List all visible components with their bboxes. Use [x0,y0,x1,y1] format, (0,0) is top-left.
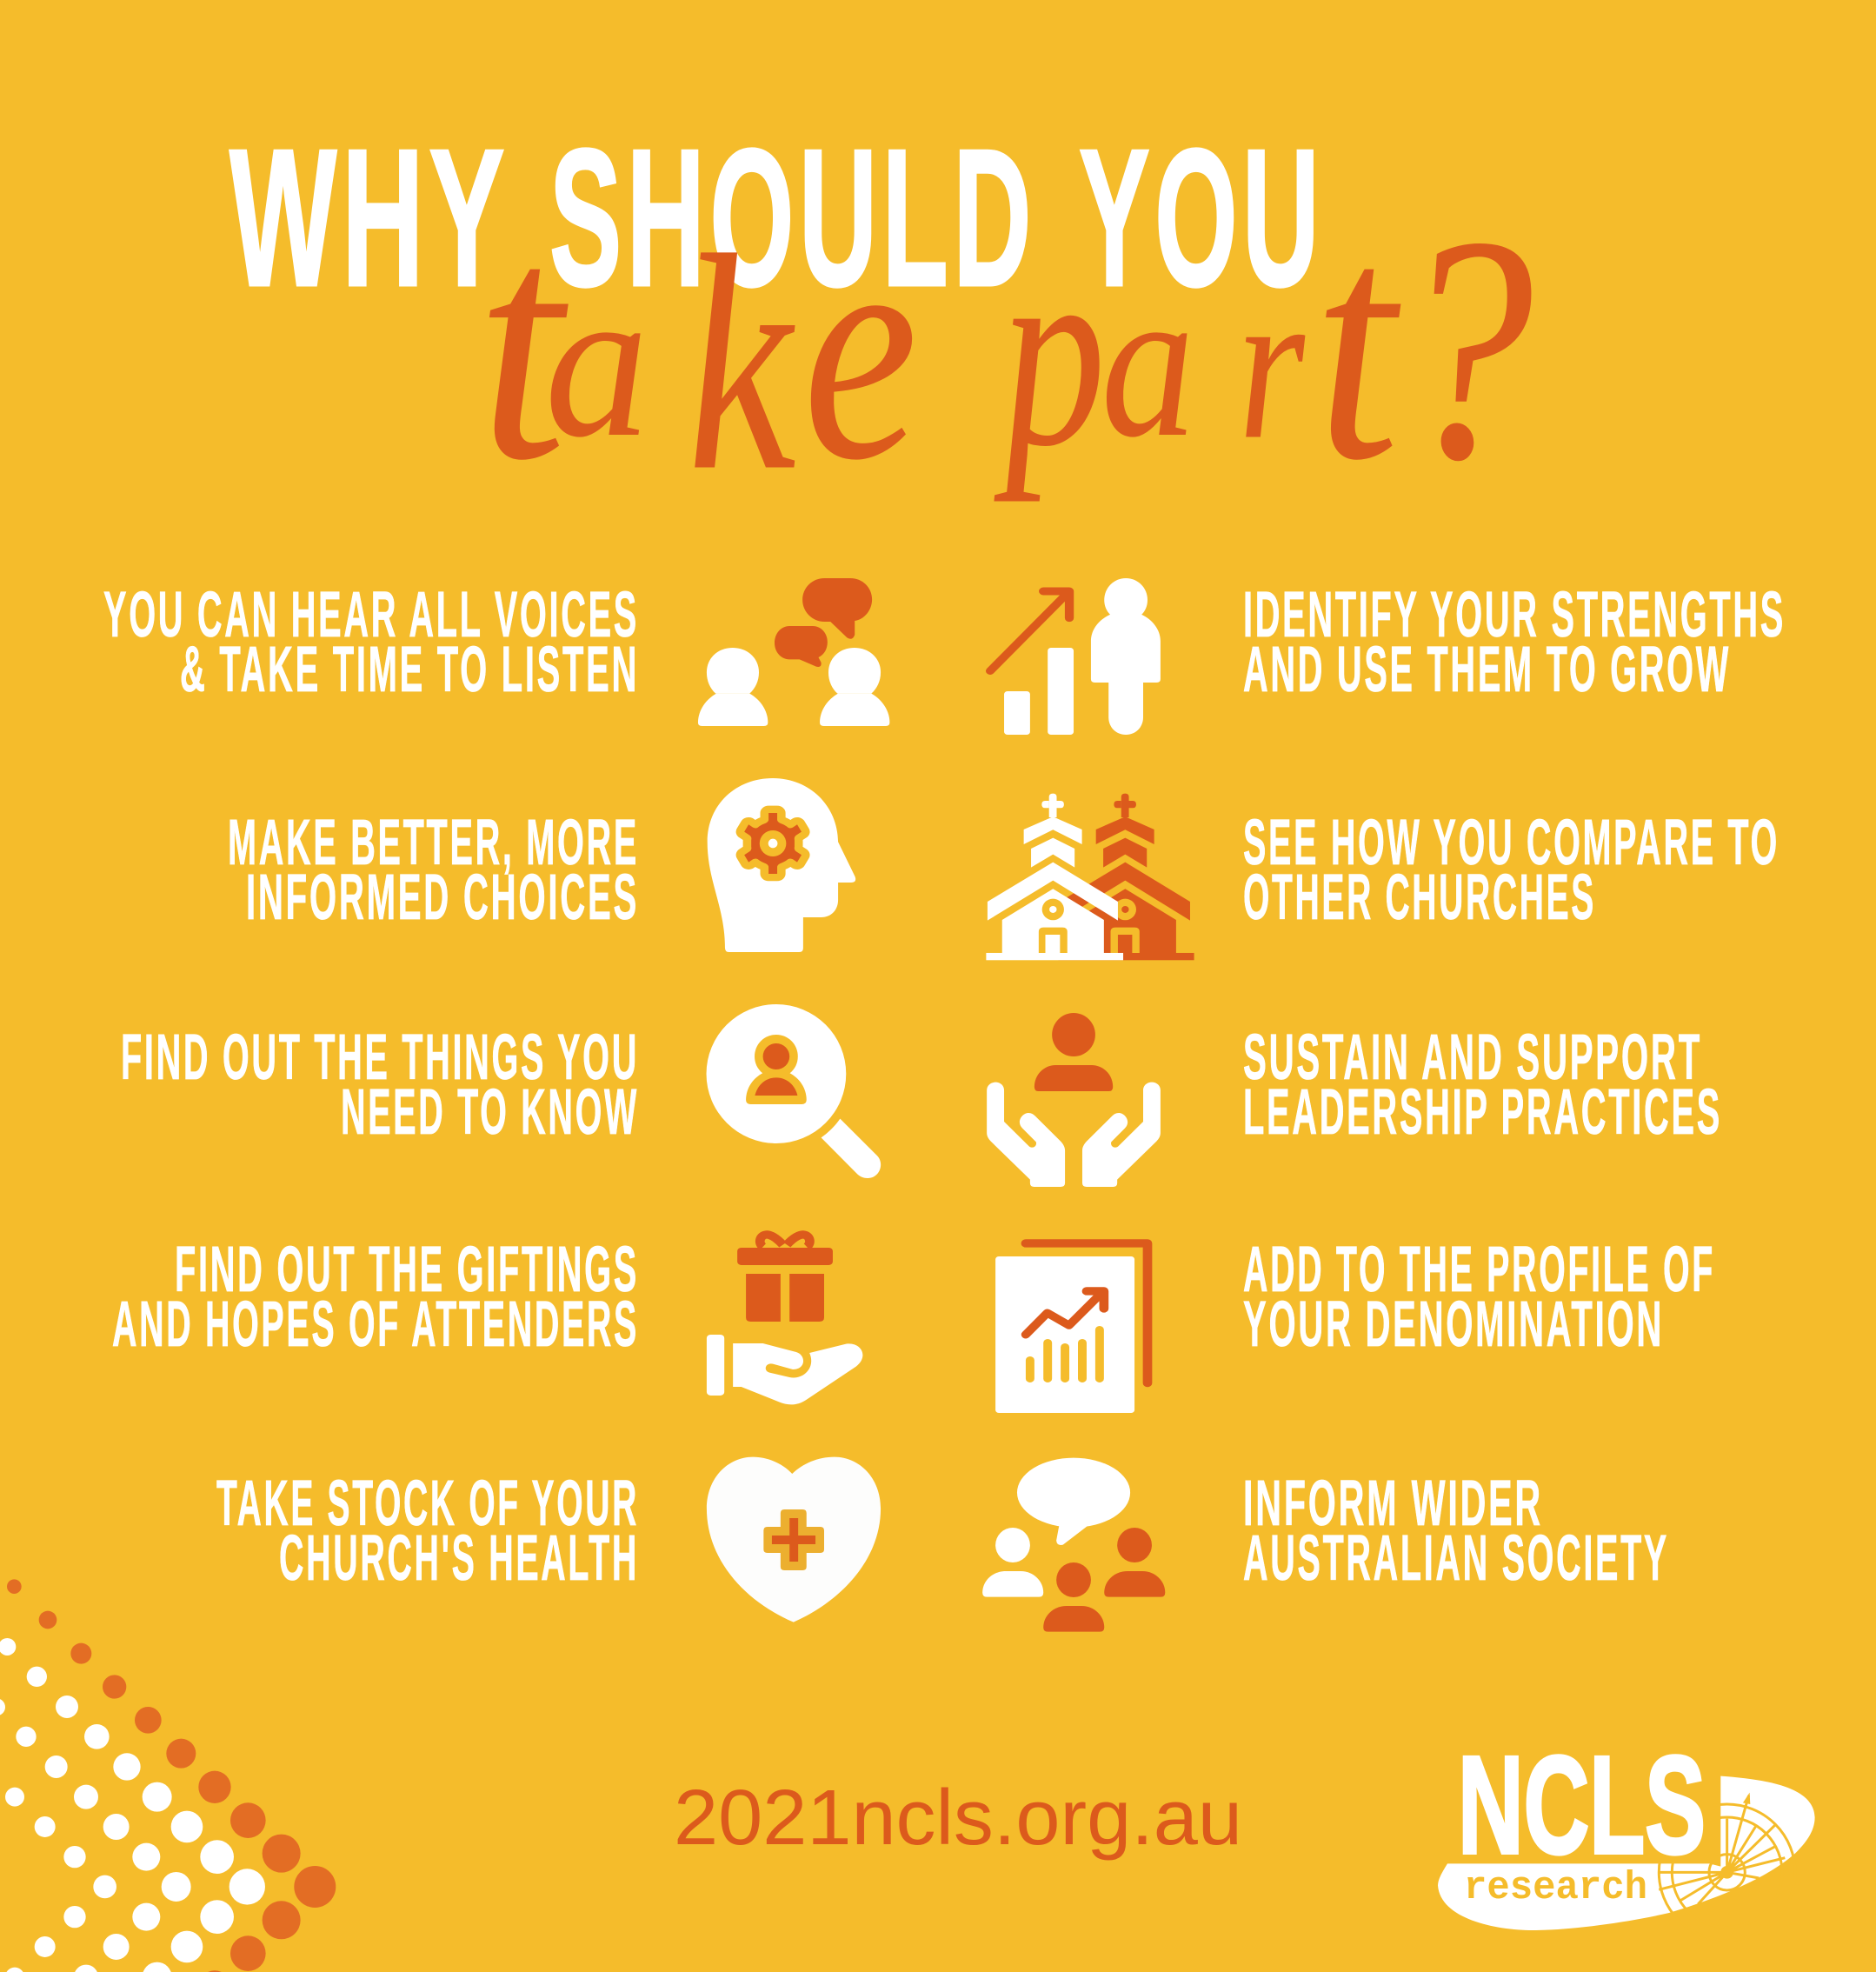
icon: hands supporting leader [987,1013,1161,1187]
icon: report with chart [995,1243,1148,1413]
title: take part? script: r [1232,243,1311,484]
icon: magnifier with person [707,1004,881,1178]
decorative dot fan [0,1579,336,1972]
text: church health: CHURCH'S HEALTH [279,1522,639,1594]
text: hear all voices: YOU CAN HEAR ALL VOICES [103,578,639,650]
text: wider society: INFORM WIDER [1243,1467,1543,1539]
text: better choices: INFORMED CHOICES [246,861,639,933]
logo: NCLS research [1438,1727,1815,1941]
title: why should you: YOU [1079,108,1324,327]
title: take part? script: t [470,160,581,529]
icon: two churches [986,794,1194,960]
title: take part? script: p [982,203,1111,503]
icon: gift on hand [707,1235,862,1404]
text: things to know: FIND OUT THE THINGS YOU [121,1021,639,1093]
logo swoosh and compass [1438,1776,1815,1941]
website url: 2021ncls.org.au [674,1775,1242,1862]
logo wordmark NCLS: NCLS [1458,1727,1706,1882]
title: take part? script: k [678,191,805,535]
title: take part? script: a [539,241,654,482]
icon: head with gear [708,778,855,952]
text: giftings and hopes: FIND OUT THE GIFTINGS [175,1233,639,1305]
icon: group with speech bubble [982,1458,1165,1632]
text: hear all voices: & TAKE TIME TO LISTEN [180,633,639,705]
title: why should you: WHY [230,108,508,327]
logo word research: research [1464,1866,1647,1910]
title: why should you: SHOULD [549,108,1036,327]
icon: two people talking [698,578,889,726]
icon: growth chart and person [990,578,1161,735]
text: things to know: NEED TO KNOW [341,1076,639,1148]
icon: heart with cross [707,1457,881,1622]
title: take part? script: a [1095,241,1200,482]
text: better choices: MAKE BETTER, MORE [228,806,639,878]
title: take part? script: ? [1390,170,1542,527]
title: take part? script: e [795,171,925,527]
title: take part? script: t [1307,160,1413,529]
text: church health: TAKE STOCK OF YOUR [216,1467,639,1539]
text: giftings and hopes: AND HOPES OF ATTENDERS [112,1288,639,1360]
